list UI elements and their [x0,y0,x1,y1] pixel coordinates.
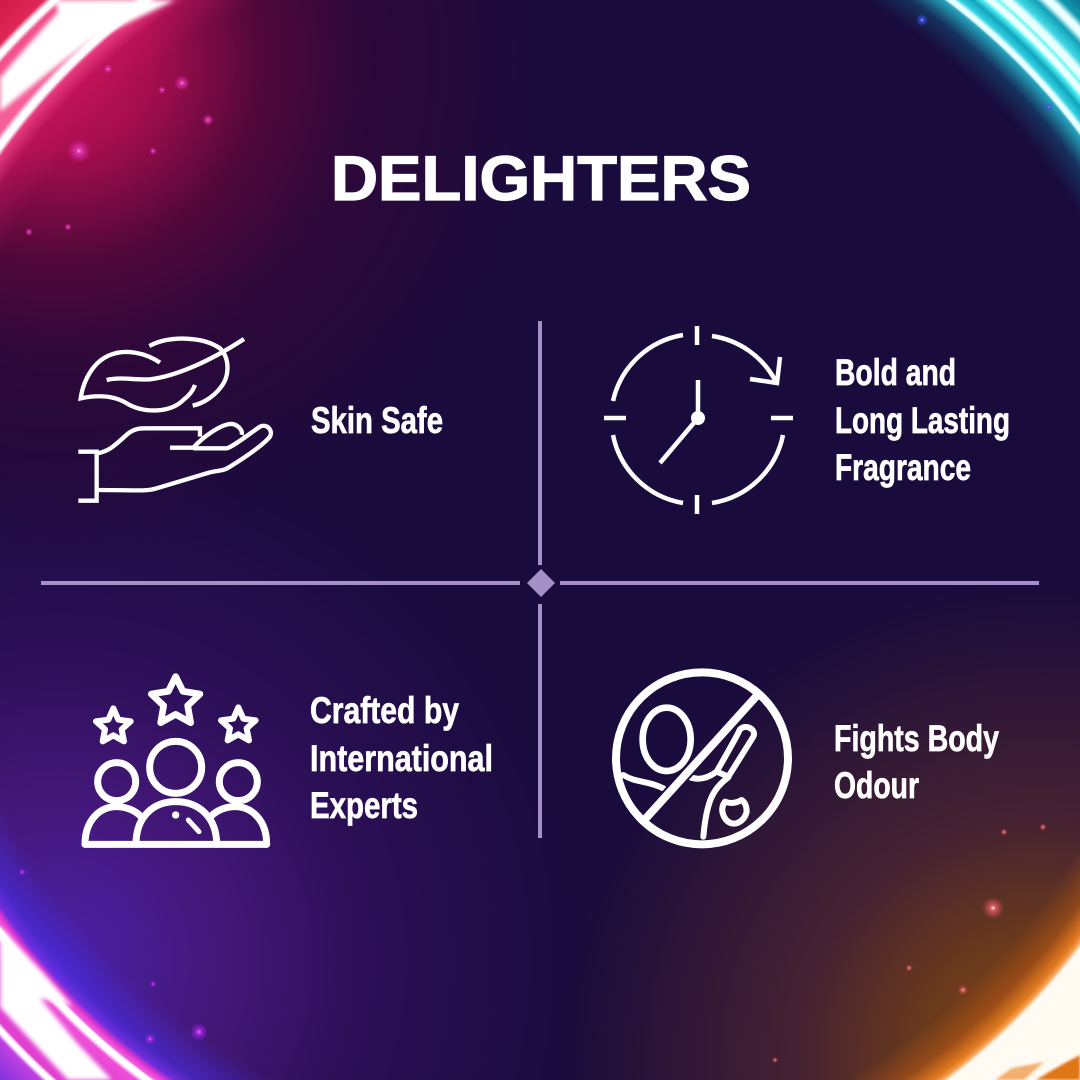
label: fights body odour [834,718,999,806]
icon: clock with arrow [604,326,793,514]
quadrant dividers [41,321,1039,838]
label: crafted by international experts [310,690,493,826]
label: fights body odour: Fights Body [834,718,999,759]
icon: feather over hand [78,339,271,501]
label: bold and long lasting fragrance: Long Lasting [835,400,1010,441]
glowing ring: top left [0,0,400,400]
glowing ring: top right [680,0,1080,400]
label: crafted by international experts: Crafted by [310,690,459,731]
light flare: bottom left [0,927,112,1080]
label: bold and long lasting fragrance: Bold and [835,352,956,393]
label: crafted by international experts: Experts [310,785,418,826]
light flare shadow: bottom right [995,1062,1044,1080]
label: bold and long lasting fragrance [835,352,1010,488]
label: crafted by international experts: International [310,738,493,779]
light flare: bottom right [1036,1055,1080,1080]
icon: experts with stars [85,677,267,844]
glowing ring: bottom left [0,680,400,1080]
title: DELIGHTERS [331,144,751,214]
glowing ring: bottom right [680,680,1080,1080]
icon: no body odour [616,672,788,844]
light flare: top left [0,0,175,112]
label: skin safe: Skin Safe [311,400,443,441]
label: fights body odour: Odour [834,765,919,806]
label: bold and long lasting fragrance: Fragrance [835,447,971,488]
